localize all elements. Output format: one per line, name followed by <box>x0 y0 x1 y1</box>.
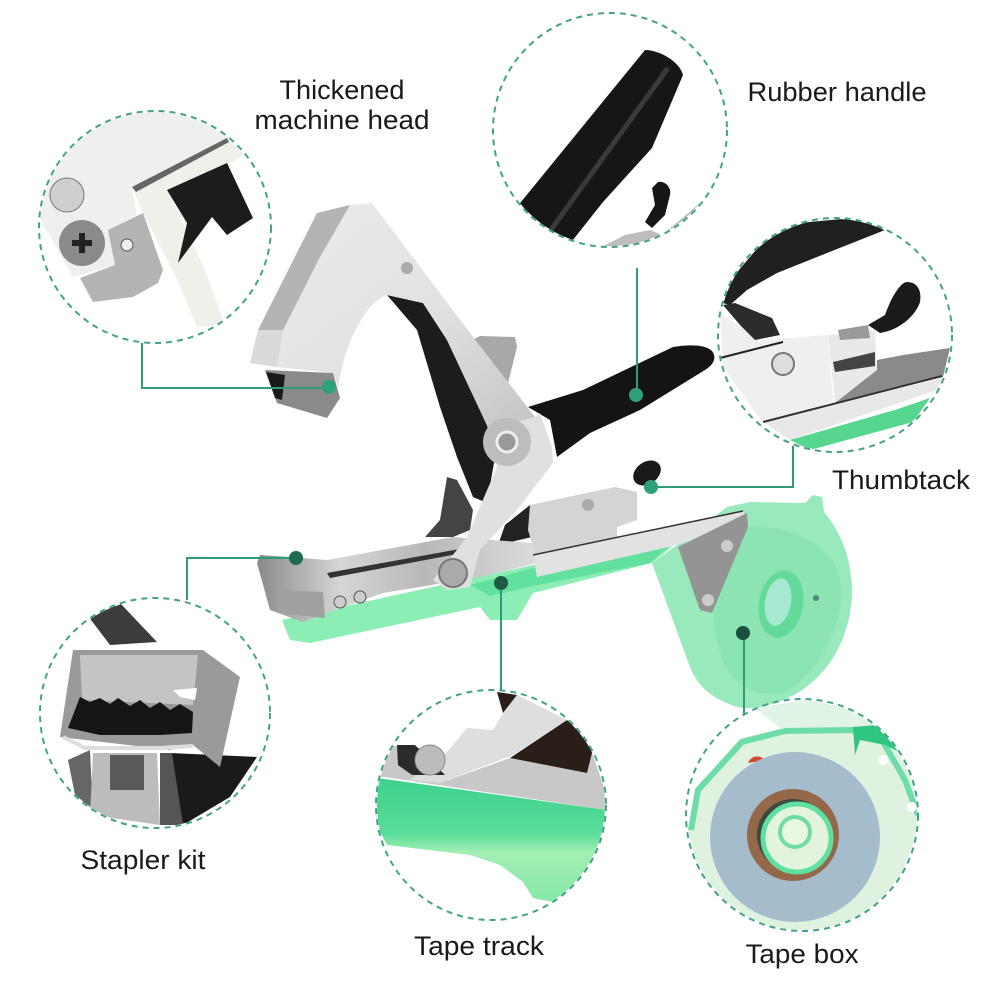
dark lever <box>387 295 495 503</box>
tape box body <box>652 495 852 708</box>
label: rubber handle: Rubber handle <box>748 77 926 107</box>
thumbtack <box>628 455 666 491</box>
lower jaw <box>257 537 537 622</box>
green tape track <box>282 540 680 643</box>
pivot plate <box>433 413 553 590</box>
rubber handle <box>528 345 714 457</box>
feed rail <box>533 511 748 577</box>
label: thickened machine head: Thickened <box>280 75 404 105</box>
triangle plate <box>678 513 748 613</box>
label: thickened machine head: machine head <box>254 105 430 135</box>
slider box <box>528 487 637 560</box>
main tool: tape tying machine <box>250 203 852 708</box>
detail circle: rubber handle <box>493 13 727 262</box>
detail circle: machine head <box>30 100 271 345</box>
detail circle: tape box <box>686 699 920 935</box>
label: stapler kit: Stapler kit <box>80 845 206 875</box>
label: tape box: Tape box <box>746 939 859 969</box>
head nose <box>265 370 340 418</box>
connector dots <box>289 380 750 640</box>
detail circle: thumbtack <box>718 215 952 452</box>
back bracket <box>472 336 517 387</box>
upper arm and head <box>250 203 535 432</box>
gap behind slider <box>498 505 532 545</box>
detail circle: tape track <box>375 690 607 920</box>
label: thickened machine head <box>254 75 430 135</box>
detail circle: stapler kit <box>40 598 270 828</box>
label: tape track: Tape track <box>414 931 545 961</box>
label: thumbtack: Thumbtack <box>832 465 971 495</box>
leg under lever <box>425 477 473 537</box>
connector lines <box>142 268 793 716</box>
